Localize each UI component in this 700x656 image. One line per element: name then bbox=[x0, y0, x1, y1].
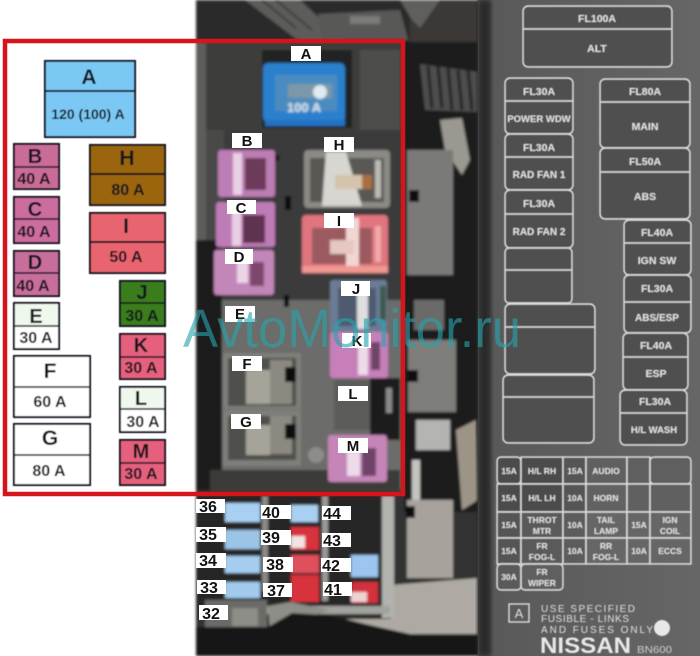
engine bay photo bbox=[196, 0, 480, 656]
legend H: H bbox=[119, 147, 135, 170]
legend D: D bbox=[28, 252, 42, 274]
cover box ABS: FL50A bbox=[629, 156, 661, 168]
label L bbox=[338, 386, 368, 403]
cover box H/L WASH: H/L WASH bbox=[631, 425, 677, 436]
legend bbox=[14, 61, 165, 485]
legend E: 30 A bbox=[19, 330, 53, 347]
label G: G bbox=[240, 414, 252, 431]
legend G: 80 A bbox=[32, 463, 66, 480]
label J: J bbox=[352, 281, 360, 298]
label 37: 37 bbox=[267, 583, 285, 600]
cover box POWER WDW: POWER WDW bbox=[507, 114, 571, 125]
cover box POWER WDW bbox=[505, 78, 573, 134]
small fuse table: AUDIO bbox=[592, 466, 620, 476]
legend J: 30 A bbox=[125, 308, 159, 325]
label C: C bbox=[236, 200, 247, 217]
legend H: 80 A bbox=[111, 182, 145, 199]
label 36 bbox=[196, 499, 225, 516]
cover box FL100A ALT: FL100A bbox=[578, 13, 616, 25]
legend A bbox=[45, 61, 135, 137]
label 39 bbox=[261, 530, 291, 547]
legend B: 40 A bbox=[17, 171, 51, 188]
cover box MAIN: FL80A bbox=[629, 86, 661, 98]
legend M: 30 A bbox=[124, 466, 158, 483]
label 42 bbox=[321, 558, 351, 575]
small fuse table: 10A bbox=[567, 493, 583, 503]
cover box H/L WASH bbox=[620, 390, 687, 445]
small fuse table: 10A bbox=[567, 520, 583, 530]
cover background bbox=[478, 0, 700, 656]
small fuse table: H/L RH bbox=[528, 466, 556, 476]
cover box RAD FAN 1: FL30A bbox=[523, 142, 555, 154]
label G bbox=[231, 414, 261, 431]
legend M bbox=[120, 440, 165, 485]
label 41: 41 bbox=[324, 582, 342, 599]
legend L bbox=[120, 387, 165, 432]
red highlight frame bbox=[5, 41, 403, 494]
legend E bbox=[14, 303, 59, 349]
legend H bbox=[90, 145, 165, 205]
label 33 bbox=[197, 580, 226, 597]
label L: L bbox=[348, 386, 358, 403]
legend I bbox=[90, 213, 165, 273]
small fuse table: TAIL bbox=[597, 515, 615, 525]
small fuse table: 15A bbox=[567, 466, 583, 476]
legend L: 30 A bbox=[126, 414, 160, 431]
cover box FL100A ALT: ALT bbox=[587, 43, 607, 55]
label B bbox=[232, 133, 262, 150]
label 38: 38 bbox=[266, 557, 284, 574]
label H bbox=[324, 137, 354, 154]
label F: F bbox=[242, 356, 252, 373]
legend F: F bbox=[44, 360, 57, 383]
label 34 bbox=[196, 553, 226, 570]
small fuse table: 15A bbox=[631, 520, 647, 530]
label 36: 36 bbox=[199, 499, 217, 516]
fuses B C D pink bbox=[214, 150, 275, 295]
small fuse table bbox=[497, 457, 691, 590]
label 32 bbox=[199, 605, 228, 623]
cover box MAIN bbox=[600, 79, 690, 148]
legend F bbox=[14, 356, 90, 417]
cover box RAD FAN 2 bbox=[505, 190, 573, 248]
cover box blank 2 bbox=[505, 304, 595, 374]
legend G bbox=[14, 424, 90, 485]
label 43 bbox=[322, 533, 351, 550]
small fuse table: IGN bbox=[662, 515, 678, 525]
legend I: 50 A bbox=[109, 249, 143, 266]
cover box IGN SW: IGN SW bbox=[638, 255, 676, 267]
legend D: 40 A bbox=[16, 278, 50, 295]
label M: M bbox=[347, 438, 359, 455]
label D bbox=[225, 249, 253, 266]
cover box ESP: FL40A bbox=[640, 340, 672, 352]
label F bbox=[232, 356, 262, 373]
warning note bbox=[509, 604, 670, 636]
small fuse table: 15A bbox=[501, 466, 517, 476]
label A bbox=[291, 46, 321, 63]
label 41 bbox=[323, 582, 352, 599]
small fuse table: THROT bbox=[527, 515, 557, 525]
legend A: A bbox=[81, 66, 97, 89]
label J bbox=[341, 281, 370, 298]
label E: E bbox=[235, 306, 245, 323]
small fuse table: 30A bbox=[501, 572, 517, 582]
small fuse table: 15A bbox=[501, 546, 517, 556]
label 40 bbox=[261, 505, 291, 522]
mini fuse number labels bbox=[196, 499, 352, 623]
small fuse table: RR bbox=[600, 541, 612, 551]
cover box ABS/ESP: FL30A bbox=[641, 283, 673, 295]
cover box RAD FAN 2: FL30A bbox=[523, 198, 555, 210]
cover box ESP bbox=[623, 333, 688, 390]
label A: A bbox=[301, 46, 312, 63]
fuse H 80 A clear bbox=[304, 150, 390, 208]
small fuse table: WIPER bbox=[528, 578, 556, 588]
printed fuse box cover bbox=[478, 0, 700, 656]
legend A: 120 (100) A bbox=[51, 106, 125, 122]
label 34: 34 bbox=[199, 553, 217, 570]
cover box H/L WASH: FL30A bbox=[639, 396, 671, 408]
cover box IGN SW: FL40A bbox=[641, 227, 673, 239]
warning note: AND FUSES ONLY bbox=[541, 625, 653, 636]
small fuse table: 10A bbox=[567, 546, 583, 556]
label 43: 43 bbox=[323, 533, 341, 550]
small fuse table: FOG-L bbox=[593, 552, 619, 562]
Nissan logo text: BN600 bbox=[637, 645, 672, 656]
cover box RAD FAN 1: RAD FAN 1 bbox=[513, 170, 566, 181]
label 44: 44 bbox=[323, 506, 341, 523]
legend C: C bbox=[28, 199, 42, 221]
legend L: L bbox=[135, 388, 147, 410]
small fuse table: LAMP bbox=[594, 526, 618, 536]
label M bbox=[338, 438, 368, 455]
relay box housing bbox=[196, 42, 402, 492]
legend J bbox=[120, 281, 165, 326]
Nissan logo text bbox=[540, 633, 672, 656]
small fuse table: MTR bbox=[533, 526, 551, 536]
small fuse table: 10A bbox=[631, 546, 647, 556]
watermark: AvtoMonitor.ru bbox=[183, 299, 521, 359]
fuse I 50 A red bbox=[302, 215, 388, 273]
legend J: J bbox=[136, 282, 148, 304]
legend C bbox=[14, 197, 59, 243]
label 39: 39 bbox=[262, 530, 280, 547]
cover box IGN SW bbox=[624, 220, 691, 275]
cover box FL100A ALT bbox=[523, 6, 672, 67]
mini fuses blue and red bbox=[225, 503, 378, 603]
fuse position labels on photo bbox=[225, 46, 371, 455]
cover box ABS bbox=[600, 148, 690, 219]
fuse A 100 A blue bbox=[263, 63, 345, 126]
legend M: M bbox=[133, 441, 149, 463]
label B: B bbox=[242, 133, 253, 150]
legend K: K bbox=[134, 335, 149, 357]
white legend background bbox=[0, 0, 196, 656]
small fuse table: FR bbox=[536, 541, 548, 551]
cover box blank 3 bbox=[503, 375, 594, 443]
small fuse table: HORN bbox=[593, 493, 619, 503]
label E bbox=[225, 306, 255, 323]
legend K bbox=[120, 334, 165, 379]
cover box ABS/ESP bbox=[624, 275, 691, 333]
cover box MAIN: MAIN bbox=[632, 121, 658, 133]
legend E: E bbox=[29, 306, 43, 328]
label 32: 32 bbox=[202, 606, 220, 623]
small fuse table: 15A bbox=[501, 520, 517, 530]
wiring harness at top bbox=[196, 0, 480, 80]
label 35 bbox=[196, 527, 226, 544]
warning note: USE SPECIFIED bbox=[541, 604, 635, 615]
fuse J 30 A green bbox=[330, 280, 387, 332]
small fuse table: ECCS bbox=[658, 546, 682, 556]
cover box POWER WDW: FL30A bbox=[523, 86, 555, 98]
right side of engine bay bbox=[330, 42, 478, 634]
label 38 bbox=[263, 557, 293, 574]
small fuse table: COIL bbox=[660, 526, 680, 536]
fuses K and M pink bbox=[328, 332, 388, 482]
label 40: 40 bbox=[262, 505, 280, 522]
label 33: 33 bbox=[200, 580, 218, 597]
legend B bbox=[14, 144, 59, 189]
cover box ABS: ABS bbox=[634, 191, 656, 203]
label 42: 42 bbox=[322, 558, 340, 575]
label K: K bbox=[352, 333, 363, 350]
cover box RAD FAN 1 bbox=[505, 134, 573, 190]
label D: D bbox=[234, 249, 245, 266]
legend C: 40 A bbox=[17, 224, 51, 241]
label 35: 35 bbox=[199, 527, 217, 544]
small fuse table: H/L LH bbox=[528, 493, 556, 503]
label K bbox=[342, 333, 371, 350]
label C bbox=[227, 200, 256, 217]
legend G: G bbox=[42, 427, 58, 450]
legend K: 30 A bbox=[124, 360, 158, 377]
label I bbox=[324, 213, 354, 230]
small fuse table: 15A bbox=[501, 493, 517, 503]
mini fuse block housing bbox=[196, 494, 478, 656]
small fuse table: FOG-L bbox=[529, 552, 555, 562]
legend B: B bbox=[28, 146, 42, 168]
label 37 bbox=[263, 583, 292, 600]
warning note: A bbox=[515, 606, 524, 621]
fuse A 100 A blue: 100 A bbox=[287, 100, 322, 115]
cover box ESP: ESP bbox=[645, 368, 667, 380]
cover box blank 1 bbox=[505, 248, 572, 303]
legend I: I bbox=[123, 215, 129, 238]
small fuse table: FR bbox=[536, 567, 548, 577]
label H: H bbox=[334, 137, 344, 154]
legend F: 60 A bbox=[33, 394, 67, 411]
label I: I bbox=[337, 213, 341, 230]
warning note: FUSIBLE - LINKS bbox=[541, 614, 629, 625]
legend D bbox=[14, 251, 59, 296]
cover box ABS/ESP: ABS/ESP bbox=[635, 313, 679, 324]
cover box RAD FAN 2: RAD FAN 2 bbox=[513, 227, 566, 238]
label 44 bbox=[322, 506, 351, 523]
